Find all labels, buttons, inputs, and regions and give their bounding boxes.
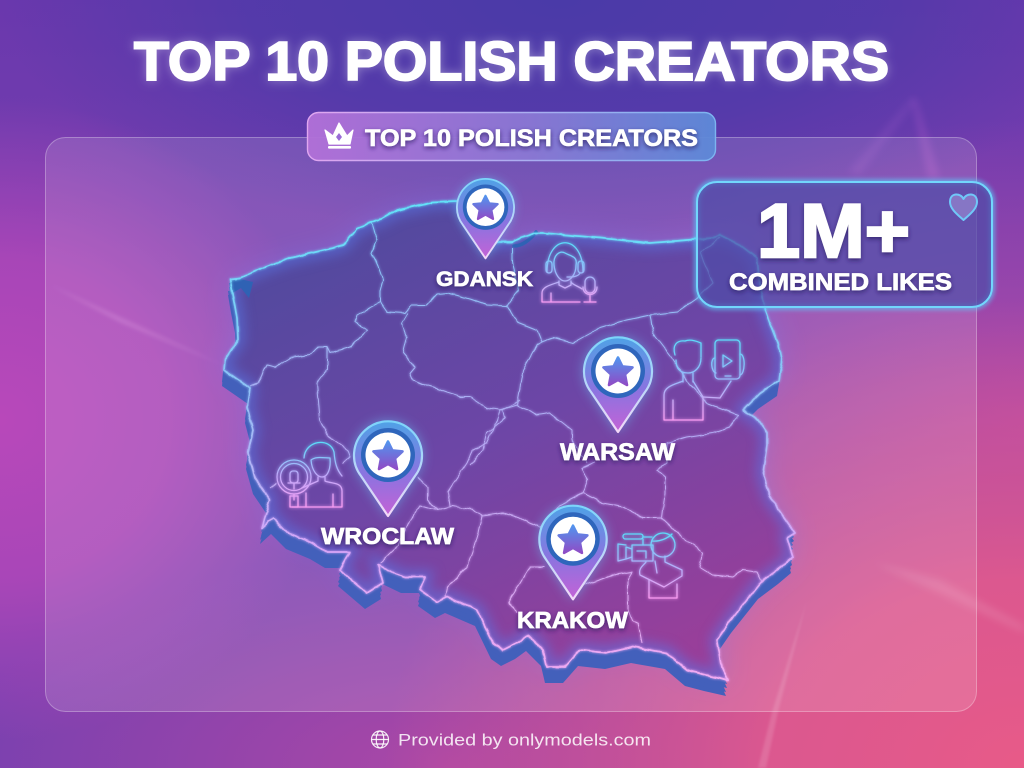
icon: camera operator: [618, 533, 682, 598]
pin: Gdansk: [457, 179, 514, 258]
icon: globe: [372, 731, 388, 748]
footer: [372, 730, 651, 750]
panel: glass card: [46, 138, 976, 712]
map surface: [224, 201, 795, 680]
pin: Warsaw: [584, 337, 652, 432]
label: Krakow: KRAKOW: [517, 607, 629, 633]
title: TOP 10 POLISH CREATORS: [134, 30, 889, 92]
icon: crown: [325, 123, 353, 149]
map extrusion: [222, 205, 794, 696]
map inner edge shading: [224, 201, 795, 680]
regional borders: [250, 223, 762, 643]
pin: Krakow: [539, 506, 607, 599]
callout box glow: [697, 182, 992, 307]
map outline: [224, 201, 795, 680]
label: Warsaw: WARSAW: [560, 439, 675, 466]
pin: Wroclaw: [354, 421, 422, 516]
icon: heart: [950, 194, 977, 220]
badge text: TOP 10 POLISH CREATORS: [365, 125, 698, 152]
label: Wroclaw: WROCLAW: [321, 523, 455, 549]
Szczecin lagoon: [230, 279, 253, 298]
icon: man with phone: [664, 340, 744, 420]
map glow: [224, 201, 795, 680]
badge background: [308, 112, 716, 160]
likes caption: COMBINED LIKES: [729, 269, 952, 296]
callout box: [697, 182, 992, 307]
source text: Provided by onlymodels.com: [398, 730, 651, 750]
map of Poland: [222, 201, 795, 696]
Vistula lagoon spit: [514, 232, 536, 246]
label: Gdansk: GDANSK: [436, 267, 533, 291]
icon: headset creator: [542, 243, 597, 302]
likes number: 1M+: [757, 189, 910, 274]
icon: woman with microphone: [277, 442, 342, 507]
callout: 1M+ combined likes: [697, 182, 992, 307]
badge: top 10 polish creators: [308, 112, 716, 160]
